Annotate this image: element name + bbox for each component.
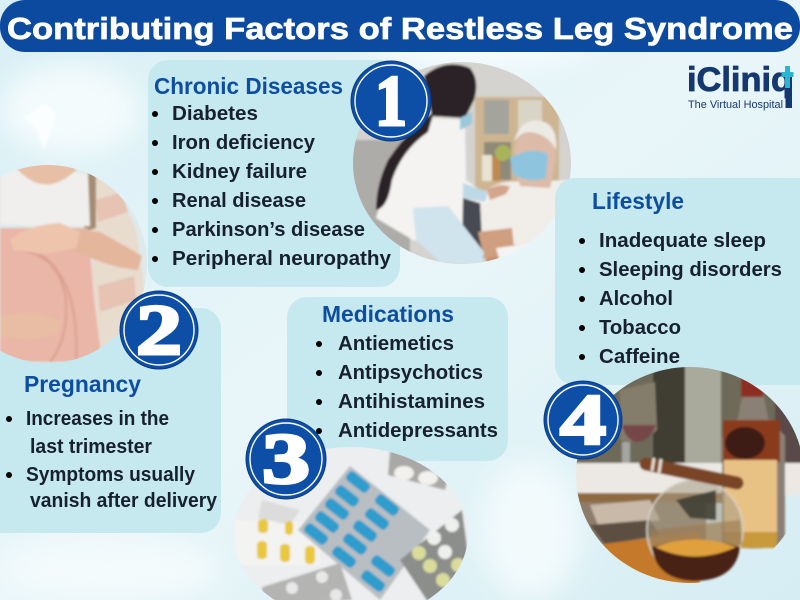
title banner — [0, 0, 800, 52]
panel: medications — [287, 297, 508, 461]
panel: lifestyle — [555, 178, 800, 385]
logo: iCliniq: The Virtual Hospital — [688, 99, 783, 111]
badge 4: 4 — [560, 380, 606, 460]
badge 1 — [351, 61, 431, 141]
title banner: Contributing Factors of Restless Leg Syndrome — [7, 11, 793, 46]
photo: medication blister packs — [230, 445, 475, 600]
list: pregnancy: Increases in the — [26, 408, 169, 430]
heading: lifestyle: Lifestyle — [592, 188, 684, 214]
list: lifestyle: Sleeping disorders — [599, 259, 782, 281]
list: medications — [316, 333, 498, 442]
bullet: antidepressants — [316, 428, 322, 434]
list: chronic diseases: Peripheral neuropathy — [172, 248, 392, 270]
photo: pregnant woman — [0, 165, 147, 363]
list: pregnancy — [6, 408, 218, 512]
list: lifestyle: Inadequate sleep — [599, 230, 766, 252]
badge 3 — [246, 419, 326, 499]
list: chronic diseases: Diabetes — [172, 103, 258, 125]
list: lifestyle: Caffeine — [599, 346, 680, 368]
heading: pregnancy: Pregnancy — [24, 371, 141, 397]
list: medications: Antipsychotics — [338, 362, 483, 384]
list: chronic diseases — [152, 103, 392, 270]
list: medications: Antihistamines — [338, 391, 485, 413]
photo: nurse and patient — [350, 60, 575, 270]
logo: iCliniq: iCliniq — [687, 61, 792, 99]
list: chronic diseases: Parkinson’s disease — [172, 219, 365, 241]
list: medications: Antiemetics — [338, 333, 454, 355]
badge 1: 1 — [375, 61, 407, 141]
list: lifestyle: Tobacco — [599, 317, 681, 339]
list: chronic diseases: Kidney failure — [172, 161, 307, 183]
list: medications: Antidepressants — [338, 420, 498, 442]
list: lifestyle: Alcohol — [599, 288, 673, 310]
panel: chronic diseases — [148, 60, 400, 287]
list: pregnancy: Symptoms usually — [26, 464, 196, 486]
list: chronic diseases: Iron deficiency — [172, 132, 316, 154]
badge 4 — [544, 380, 622, 460]
heading: chronic diseases: Chronic Diseases — [154, 73, 343, 99]
badge 2 — [120, 290, 198, 370]
heading: medications: Medications — [322, 301, 454, 327]
photo: alcohol and cigar — [570, 360, 800, 590]
list: chronic diseases: Renal disease — [172, 190, 306, 212]
badge 2: 2 — [136, 290, 182, 370]
list: lifestyle — [579, 230, 782, 368]
list: pregnancy: last trimester — [30, 436, 152, 458]
list: pregnancy: vanish after delivery — [30, 490, 218, 512]
badge 3: 3 — [262, 419, 310, 499]
panel: pregnancy — [0, 308, 221, 533]
